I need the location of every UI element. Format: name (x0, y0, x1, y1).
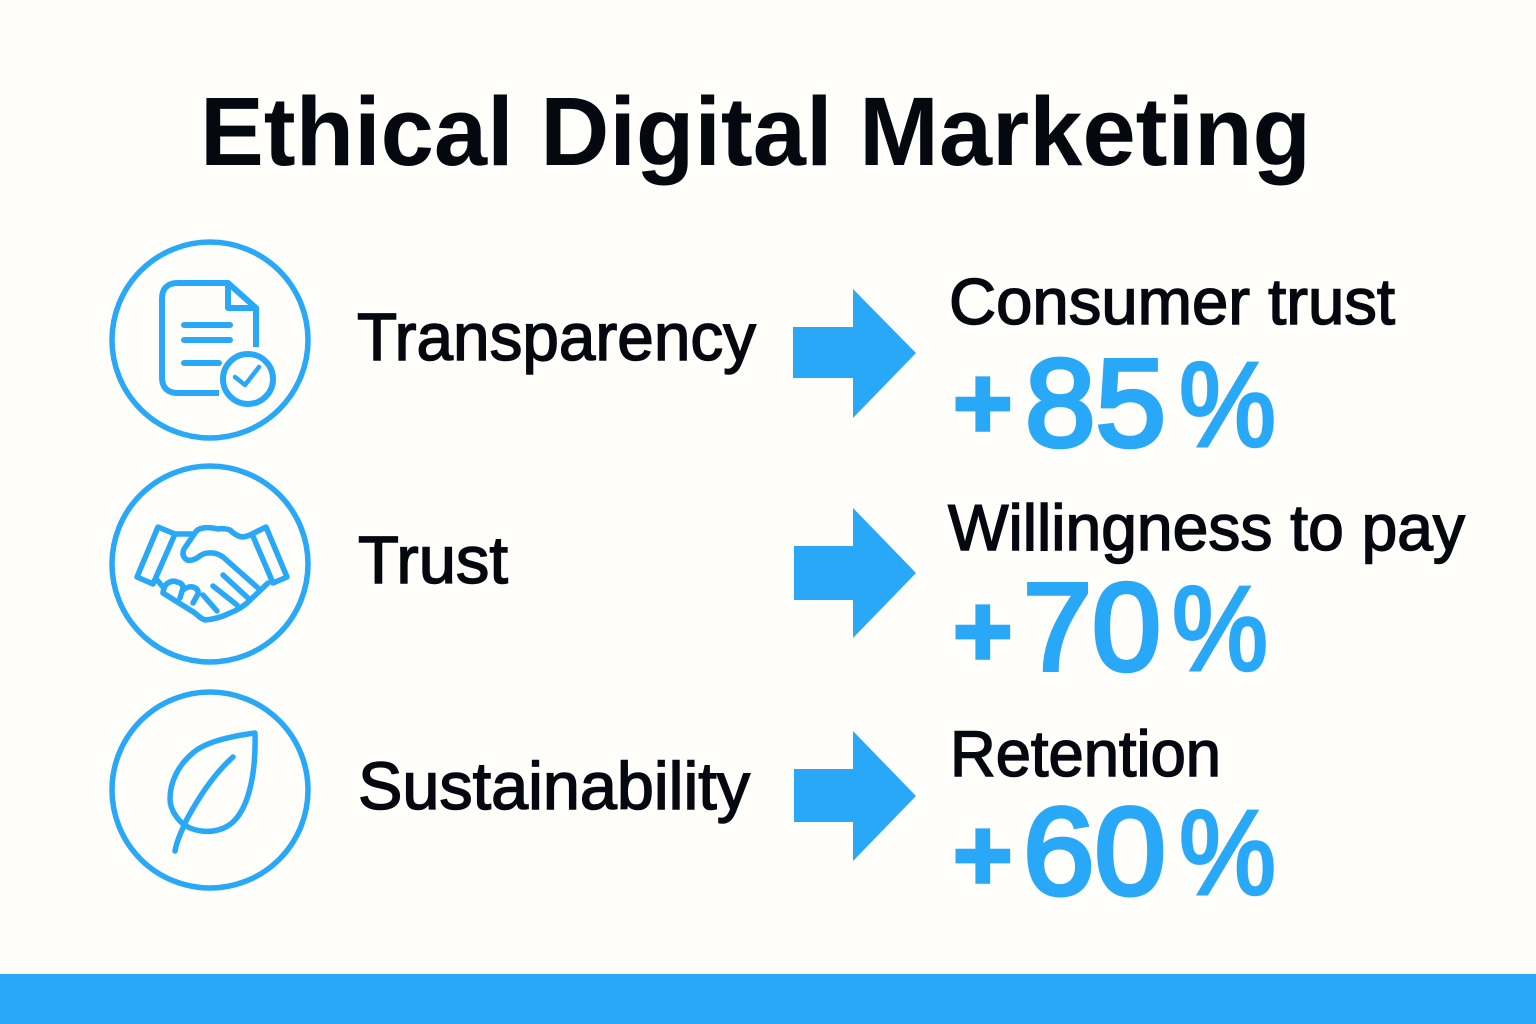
row: transparency (112, 242, 1395, 473)
result label: consumer trust: Consumer trust (949, 265, 1395, 338)
arrow: sustainability to retention (794, 731, 916, 861)
icon: leaf (112, 692, 308, 888)
row: sustainability (112, 692, 1276, 921)
label: sustainability: Sustainability (358, 749, 750, 824)
stat: +60%: 60 (1023, 783, 1166, 921)
stat: +70%: 70 (1023, 559, 1161, 697)
arrow: transparency to consumer trust (793, 289, 916, 418)
arrow: trust to willingness to pay (794, 508, 916, 638)
stat: +70%: + (953, 574, 1013, 688)
stat: +60%: + (953, 798, 1013, 912)
stat: +60%: % (1179, 786, 1276, 920)
stat: +85% (953, 335, 1276, 473)
label: transparency: Transparency (357, 300, 756, 375)
stat: +70%: % (1172, 562, 1268, 696)
title: Ethical Digital Marketing (200, 77, 1311, 186)
result label: retention: Retention (950, 717, 1221, 790)
result label: willingness to pay: Willingness to pay (948, 491, 1465, 564)
stat: +85%: + (953, 346, 1013, 460)
label: trust: Trust (358, 523, 508, 598)
icon: document with check mark (112, 242, 308, 438)
stat: +85%: % (1179, 338, 1276, 472)
icon: handshake (112, 466, 308, 662)
stat: +70% (953, 559, 1268, 697)
stat: +60% (953, 783, 1276, 921)
stat: +85%: 85 (1025, 335, 1166, 473)
footer bar (0, 974, 1536, 1024)
row: trust (112, 466, 1465, 697)
